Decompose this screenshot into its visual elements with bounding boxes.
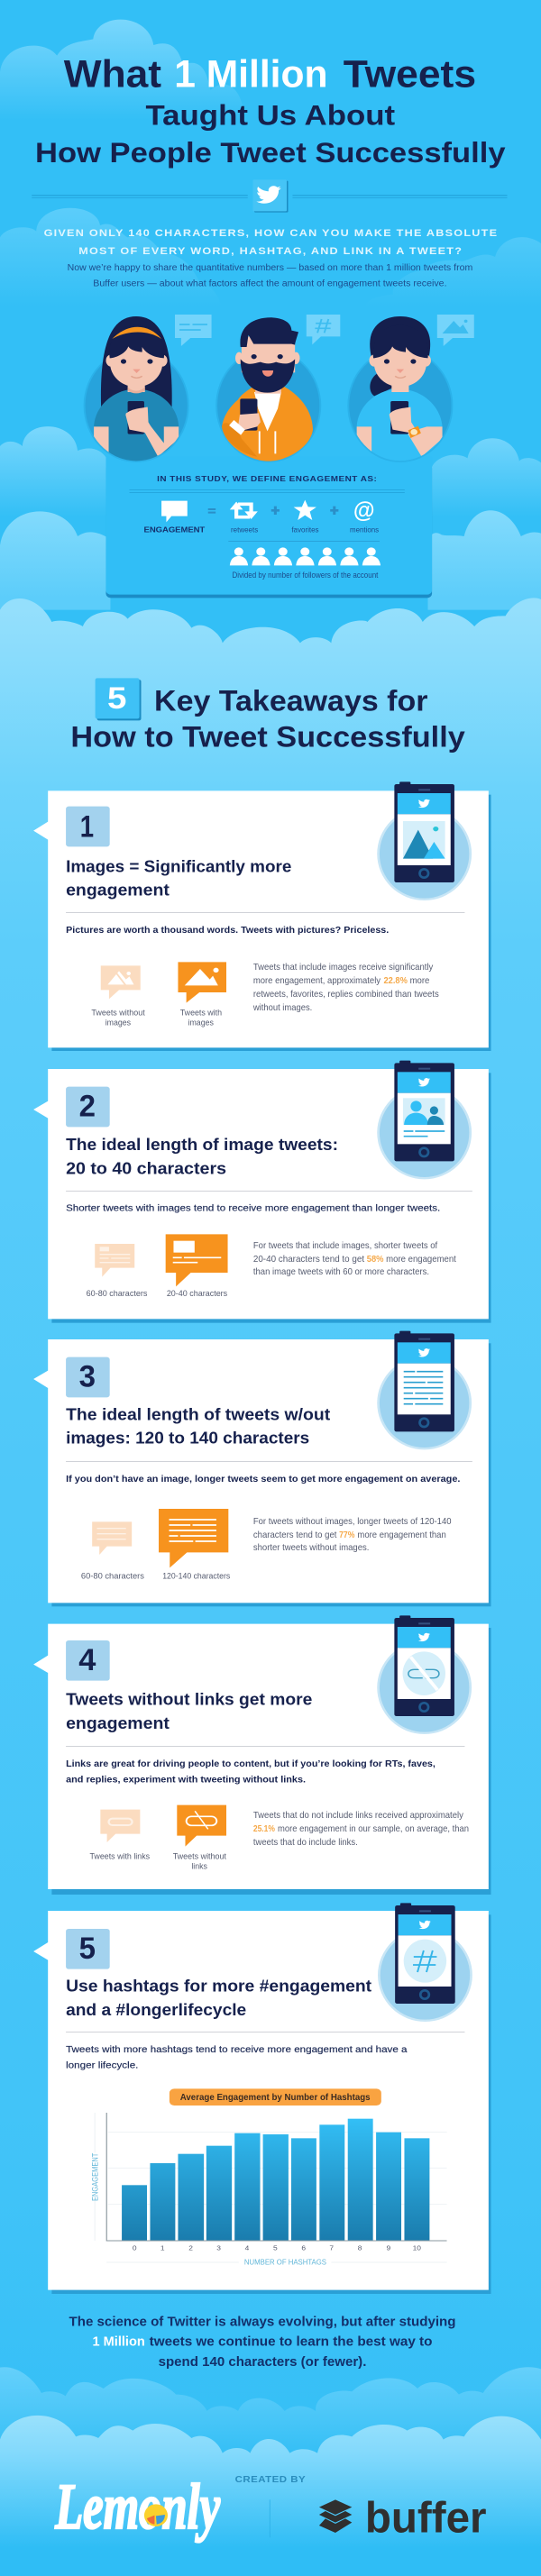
followers row xyxy=(230,547,381,565)
x axis tick labels: 8 xyxy=(358,2244,362,2252)
stat text xyxy=(253,1242,456,1277)
heading xyxy=(66,1691,312,1733)
mention icon: @ xyxy=(353,497,375,523)
number box xyxy=(66,1357,110,1397)
x axis tick labels: 2 xyxy=(188,2244,193,2252)
subheading: and replies, experiment with tweeting without links. xyxy=(66,1775,306,1785)
stat text: 25.1% xyxy=(253,1825,275,1834)
x axis tick labels: 5 xyxy=(273,2244,278,2252)
heading: engagement xyxy=(66,882,170,900)
phone illustration: profile xyxy=(377,1061,472,1179)
title xyxy=(35,52,506,169)
title: What xyxy=(64,52,161,96)
stat text: retweets, favorites, replies combined than tweets xyxy=(253,991,439,1000)
panel: takeaway 2 xyxy=(33,1061,491,1323)
closing statement: spend 140 characters (or fewer). xyxy=(159,2354,366,2370)
heading: The ideal length of tweets w/out xyxy=(66,1406,330,1424)
y axis label: ENGAGEMENT xyxy=(90,2152,100,2201)
speech bubble: hashtag xyxy=(307,315,340,344)
subheading: Pictures are worth a thousand words. Tweets with pictures? Priceless. xyxy=(66,926,389,936)
intro text: Buffer users — about what factors affect the amount of engagement tweets receive. xyxy=(93,279,447,288)
stat text: tweets that do include links. xyxy=(253,1839,358,1848)
number badge xyxy=(96,678,142,720)
stat text: more engagement, approximately xyxy=(253,977,381,986)
stat text: 20-40 characters tend to get xyxy=(253,1256,364,1265)
x axis tick labels: 10 xyxy=(413,2244,422,2252)
speech bubble: text xyxy=(175,315,212,346)
panel heading: IN THIS STUDY, WE DEFINE ENGAGEMENT AS: xyxy=(157,475,377,483)
followers caption: Divided by number of followers of the account xyxy=(233,571,379,580)
credits xyxy=(55,2471,487,2543)
icon: 60-80 characters xyxy=(92,1521,132,1555)
engagement definition panel xyxy=(105,457,432,598)
heading: Use hashtags for more #engagement xyxy=(66,1978,371,1996)
panel: takeaway 4 xyxy=(33,1615,491,1895)
number box: 5 xyxy=(79,1930,96,1965)
equals sign xyxy=(208,508,215,514)
component labels: mentions xyxy=(350,525,379,534)
icon labels: 20-40 characters xyxy=(167,1290,227,1299)
stat text: more engagement xyxy=(386,1256,456,1265)
heading xyxy=(66,1978,371,2020)
heading: images: 120 to 140 characters xyxy=(66,1430,309,1448)
engagement label: ENGAGEMENT xyxy=(144,525,206,534)
phone illustration: hashtag xyxy=(378,1903,472,2022)
stat text xyxy=(253,1518,452,1553)
component labels: retweets xyxy=(231,525,259,534)
x axis tick labels: 1 xyxy=(160,2244,165,2252)
subheading: Links are great for driving people to content, but if you’re looking for RTs, faves, xyxy=(66,1759,436,1769)
chart title pill xyxy=(170,2088,381,2106)
person: bearded man in orange hoodie xyxy=(215,317,321,462)
stat text: characters tend to get xyxy=(253,1531,337,1540)
heading: 20 to 40 characters xyxy=(66,1160,226,1178)
person: woman with headband xyxy=(84,316,189,462)
heading xyxy=(66,1136,338,1178)
number box xyxy=(66,807,110,846)
component labels: favorites xyxy=(291,525,319,534)
bar chart: engagement by number of hashtags xyxy=(90,2113,447,2267)
clouds: footer xyxy=(0,2367,541,2576)
created by label: CREATED BY xyxy=(235,2475,306,2485)
stat text xyxy=(252,964,439,1013)
x axis tick labels: 9 xyxy=(387,2244,390,2252)
stat text: than image tweets with 60 or more characters. xyxy=(253,1268,429,1277)
intro text: MOST OF EVERY WORD, HASHTAG, AND LINK IN A TWEET? xyxy=(78,245,462,257)
number badge: 5 xyxy=(107,680,126,715)
stat text: 58% xyxy=(367,1256,384,1265)
plus sign xyxy=(271,507,280,515)
subheading: longer lifecycle. xyxy=(66,2060,138,2070)
closing statement: The science of Twitter is always evolving, but after studying xyxy=(69,2315,455,2329)
three tweeting people illustration xyxy=(84,315,474,462)
intro text xyxy=(44,227,497,288)
subheading xyxy=(66,2045,408,2070)
subheading xyxy=(66,1759,436,1785)
icon: tweets without links xyxy=(177,1805,226,1847)
background clouds: top xyxy=(0,20,541,306)
icon labels xyxy=(87,1290,227,1299)
retweet icon xyxy=(230,502,258,519)
icon labels: 60-80 characters xyxy=(87,1290,148,1299)
x axis tick labels: 3 xyxy=(216,2244,222,2252)
heading text xyxy=(70,685,465,754)
closing statement xyxy=(69,2315,455,2370)
panel: takeaway 5 xyxy=(33,1903,491,2294)
icon: tweets with links xyxy=(100,1810,140,1842)
heading: The ideal length of image tweets: xyxy=(66,1136,338,1155)
phone illustration: broken link xyxy=(377,1615,472,1734)
stat text: without images. xyxy=(252,1004,312,1013)
icon labels: images xyxy=(105,1019,131,1028)
number box xyxy=(66,1640,110,1681)
icon labels xyxy=(91,1009,222,1028)
x axis tick labels: 6 xyxy=(301,2244,307,2252)
closing statement: 1 Million xyxy=(93,2334,145,2349)
x axis tick labels xyxy=(133,2244,422,2252)
number box xyxy=(66,1087,110,1127)
x axis tick labels: 0 xyxy=(133,2244,137,2252)
intro text: GIVEN ONLY 140 CHARACTERS, HOW CAN YOU MAKE THE ABSOLUTE xyxy=(44,227,497,239)
icon: tweets with images xyxy=(178,962,226,1003)
x axis tick labels: 7 xyxy=(329,2244,334,2252)
number box: 4 xyxy=(78,1641,96,1676)
stat text: more engagement in our sample, on average, than xyxy=(278,1825,469,1834)
number box: 2 xyxy=(79,1088,96,1123)
section heading: 5 key takeaways xyxy=(70,678,465,754)
star icon xyxy=(294,500,316,520)
stat text: more engagement than xyxy=(357,1531,446,1540)
chart title pill: Average Engagement by Number of Hashtags xyxy=(180,2094,371,2103)
stat text: Tweets that include images receive significantly xyxy=(253,964,434,973)
icon labels: links xyxy=(191,1862,207,1871)
number box: 1 xyxy=(80,808,94,844)
x axis label: NUMBER OF HASHTAGS xyxy=(244,2258,326,2267)
heading xyxy=(66,858,291,900)
logo: Lemonly: Lemonly xyxy=(55,2471,221,2543)
heading text: How to Tweet Successfully xyxy=(70,721,465,754)
heading: Tweets without links get more xyxy=(66,1691,312,1709)
intro text: Now we’re happy to share the quantitative numbers — based on more than 1 million tweets from xyxy=(68,263,472,273)
engagement icon xyxy=(161,501,188,522)
panel: takeaway 1 xyxy=(33,781,491,1051)
subheading: If you don’t have an image, longer tweets seem to get more engagement on average. xyxy=(66,1475,460,1484)
icon labels xyxy=(81,1572,230,1581)
title: Tweets xyxy=(344,52,476,96)
icon labels: Tweets with xyxy=(180,1009,222,1018)
icon: 120-140 characters xyxy=(159,1509,228,1567)
subheading: Tweets with more hashtags tend to receive more engagement and have a xyxy=(66,2045,408,2055)
number box xyxy=(66,1929,110,1969)
icon labels: Tweets with links xyxy=(89,1852,150,1861)
icon labels xyxy=(89,1852,226,1871)
phone illustration: text tweet xyxy=(377,1331,472,1449)
stat text: 77% xyxy=(339,1531,354,1540)
plus sign xyxy=(330,507,338,515)
icon: tweets without images xyxy=(101,965,141,999)
stat text: shorter tweets without images. xyxy=(253,1544,369,1553)
heading xyxy=(66,1406,330,1448)
stat text: For tweets without images, longer tweets of 120-140 xyxy=(253,1518,452,1527)
logo: Buffer: buffer xyxy=(365,2494,487,2542)
icon labels: 60-80 characters xyxy=(81,1572,144,1581)
logo: Lemonly xyxy=(55,2471,221,2543)
stat text xyxy=(253,1812,469,1848)
closing statement: tweets we continue to learn the best way to xyxy=(150,2334,433,2349)
twitter badge with divider xyxy=(32,179,507,213)
icon labels: Tweets without xyxy=(91,1009,145,1018)
x axis tick labels: 4 xyxy=(245,2244,250,2252)
title: Taught Us About xyxy=(145,99,395,132)
heading: Images = Significantly more xyxy=(66,858,291,876)
icon: 20-40 characters xyxy=(166,1234,228,1286)
heading: and a #longerlifecycle xyxy=(66,2001,246,2020)
component labels xyxy=(231,525,379,534)
heading: engagement xyxy=(66,1714,170,1733)
stat text: For tweets that include images, shorter tweets of xyxy=(253,1242,437,1251)
heading text: Key Takeaways for xyxy=(154,685,428,717)
phone illustration: image xyxy=(377,781,472,900)
icon labels: 120-140 characters xyxy=(162,1572,230,1581)
panel: takeaway 3 xyxy=(33,1331,491,1606)
icon labels: Tweets without xyxy=(173,1852,226,1861)
title: How People Tweet Successfully xyxy=(35,137,506,169)
title: 1 Million xyxy=(174,52,328,96)
stat text: Tweets that do not include links received approximately xyxy=(253,1812,464,1821)
bars xyxy=(122,2119,429,2241)
person: woman with ponytail xyxy=(347,316,453,462)
stat text: more xyxy=(410,977,430,986)
stat text: 22.8% xyxy=(384,977,408,986)
number box: 3 xyxy=(79,1358,96,1393)
speech bubble: image xyxy=(437,315,474,346)
icon labels: images xyxy=(188,1019,214,1028)
subheading: Shorter tweets with images tend to receive more engagement than longer tweets. xyxy=(66,1203,440,1213)
logo: Buffer xyxy=(319,2494,487,2542)
icon: 60-80 characters xyxy=(95,1244,134,1277)
